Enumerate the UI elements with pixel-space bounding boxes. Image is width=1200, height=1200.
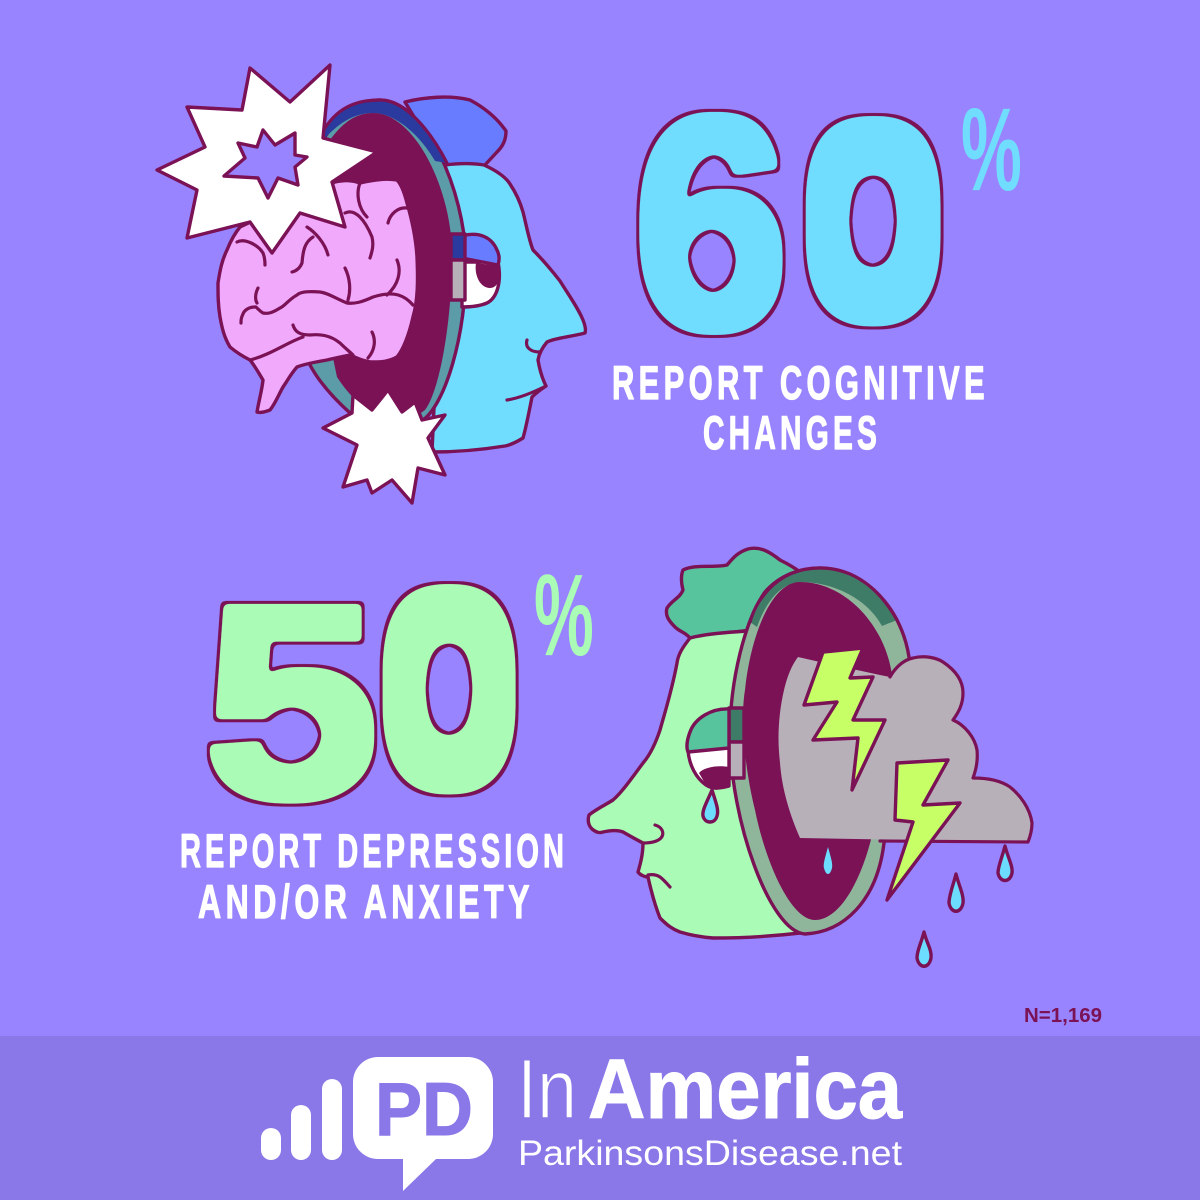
footer band: [0, 1036, 1200, 1200]
rain drop right: [998, 846, 1012, 880]
ring band grey: [729, 742, 744, 778]
nose and mouth lines: [507, 340, 546, 400]
sample size note: N=1,169: [1024, 1005, 1102, 1027]
eyeball: [462, 262, 499, 307]
digit 0: 0: [798, 81, 949, 362]
portal ring: [730, 568, 910, 934]
ring band dark: [729, 708, 744, 742]
percent sign: %: [534, 551, 594, 681]
rain drop lower: [917, 932, 931, 966]
ring band grey: [451, 260, 465, 300]
digit 0: 0: [375, 549, 524, 830]
digit 6: 6: [633, 55, 789, 391]
star hole: [224, 130, 307, 198]
portal ring outline: [750, 568, 897, 622]
tear drop: [703, 790, 718, 822]
eye: [451, 234, 500, 307]
eyelid: [462, 234, 499, 265]
small explosion star: [323, 390, 445, 503]
rain drop middle: [949, 874, 963, 911]
blue head profile: [432, 164, 585, 452]
hair: [666, 548, 800, 638]
portal ring dark arc: [750, 568, 897, 627]
star burst: [157, 65, 377, 253]
logo: signal bars: [261, 1079, 342, 1160]
50 percent figure: [204, 549, 594, 854]
logo: PD letters: PD: [375, 1067, 473, 1151]
digit 5: 5: [204, 551, 379, 854]
brain body: [218, 179, 418, 412]
green head profile: [588, 631, 800, 938]
portal interior: [300, 113, 452, 420]
illustration: head with brain and explosions: [157, 65, 585, 503]
large explosion star: [157, 65, 377, 253]
ring band over eye: [451, 234, 465, 260]
pupil: [476, 263, 500, 288]
eyelid: [687, 709, 729, 752]
wordmark: In: In: [517, 1042, 577, 1136]
wordmark: America: America: [588, 1042, 903, 1136]
caption: report depression and/or anxiety: [180, 824, 568, 928]
caption line 2: CHANGES: [703, 406, 881, 459]
60 percent figure: [633, 55, 1022, 391]
caption line 1: REPORT DEPRESSION: [180, 824, 568, 877]
portal ring dark blue arc: [325, 100, 447, 163]
pupil: [699, 766, 729, 788]
portal interior: [743, 582, 892, 920]
footer background: [0, 1036, 1200, 1200]
caption: report cognitive changes: [612, 356, 989, 459]
portal ring: [300, 100, 466, 432]
lightning bolt lower: [887, 760, 960, 900]
lightning bolt upper: [804, 648, 885, 790]
brain folds: [237, 183, 413, 360]
caption line 1: REPORT COGNITIVE: [612, 356, 989, 409]
head hair cap: [405, 97, 506, 168]
logo: speech bubble: [353, 1057, 493, 1191]
eye: [687, 708, 744, 788]
nose and mouth lines: [643, 825, 670, 887]
drop inside portal: [824, 847, 832, 874]
storm cloud outline: [880, 657, 1032, 842]
brain: [218, 179, 418, 412]
eyeball: [688, 748, 729, 788]
percent sign: %: [961, 85, 1022, 216]
website address: ParkinsonsDisease.net: [518, 1134, 902, 1173]
portal ring outline: [325, 100, 447, 163]
storm cloud body: [778, 657, 1032, 842]
caption line 2: AND/OR ANXIETY: [198, 875, 534, 928]
illustration: sad head with storm cloud: [588, 548, 1032, 966]
